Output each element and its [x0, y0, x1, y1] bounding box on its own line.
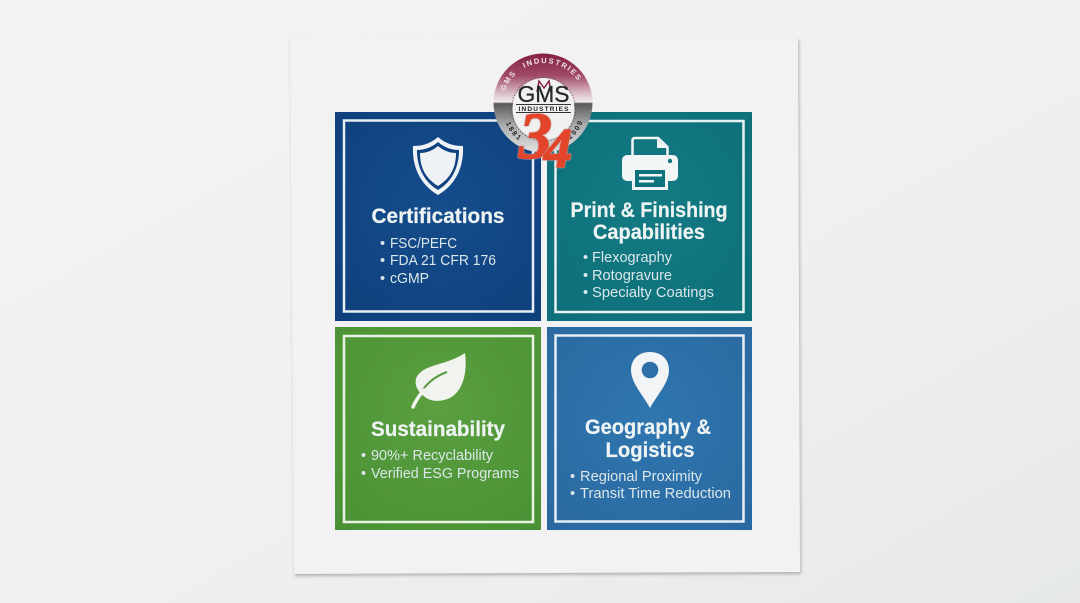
list: sustainability: 90%+ Recyclability [371, 448, 494, 464]
number 34: 3 [518, 100, 552, 173]
ring text [501, 58, 582, 140]
heading: geography and logistics: Logistics [606, 439, 694, 462]
ring text: INDUSTRIES [522, 58, 581, 80]
list: certifications: cGMP [390, 271, 429, 287]
heading: print and finishing: Print & Finishing [570, 199, 728, 222]
number 34 [518, 100, 572, 180]
list: print and finishing: Specialty Coatings [592, 285, 714, 301]
ring text: 1881 [506, 122, 521, 140]
number 34: 4 [543, 118, 572, 180]
ring text: 2009 [570, 121, 582, 140]
logo wordmark: GMS [518, 81, 570, 107]
panel: print and finishing [547, 112, 752, 321]
list: certifications: • [380, 271, 385, 287]
list: print and finishing [583, 250, 714, 301]
paper sheet [290, 37, 801, 576]
list: print and finishing: • [583, 268, 588, 284]
list: print and finishing: Flexography [592, 250, 673, 266]
logo wordmark: INDUSTRIES [518, 106, 569, 113]
icon: shield [413, 137, 463, 195]
list: certifications: • [380, 236, 385, 252]
list: geography and logistics [570, 469, 731, 502]
list: certifications: FSC/PEFC [390, 236, 457, 252]
ring text: GMS [501, 72, 515, 90]
icon: leaf [413, 353, 466, 407]
heading: geography and logistics: Geography & [585, 416, 711, 439]
list: sustainability: • [361, 466, 366, 482]
panel: sustainability [335, 327, 541, 530]
list: print and finishing: • [583, 250, 588, 266]
list: certifications [380, 236, 496, 287]
panel: certifications [335, 112, 541, 321]
list: geography and logistics: Regional Proximity [580, 469, 703, 485]
heading: print and finishing [570, 199, 728, 244]
heading: sustainability: Sustainability [371, 418, 505, 441]
heading: print and finishing: Capabilities [593, 221, 705, 244]
list: certifications: FDA 21 CFR 176 [390, 253, 496, 269]
list: print and finishing: Rotogravure [592, 268, 672, 284]
list: sustainability: • [361, 448, 366, 464]
list: geography and logistics: Transit Time Reduction [580, 486, 731, 502]
badge ring [494, 54, 592, 152]
list: print and finishing: • [583, 285, 588, 301]
icon: printer [622, 138, 678, 190]
heading: geography and logistics [585, 416, 711, 462]
list: sustainability: Verified ESG Programs [371, 466, 519, 482]
list: sustainability [361, 448, 519, 482]
heading: certifications: Certifications [372, 205, 504, 228]
panel: geography and logistics [547, 327, 752, 530]
list: geography and logistics: • [570, 469, 575, 485]
list: certifications: • [380, 253, 385, 269]
logo badge [494, 54, 592, 180]
icon: map pin [631, 352, 669, 408]
list: geography and logistics: • [570, 486, 575, 502]
